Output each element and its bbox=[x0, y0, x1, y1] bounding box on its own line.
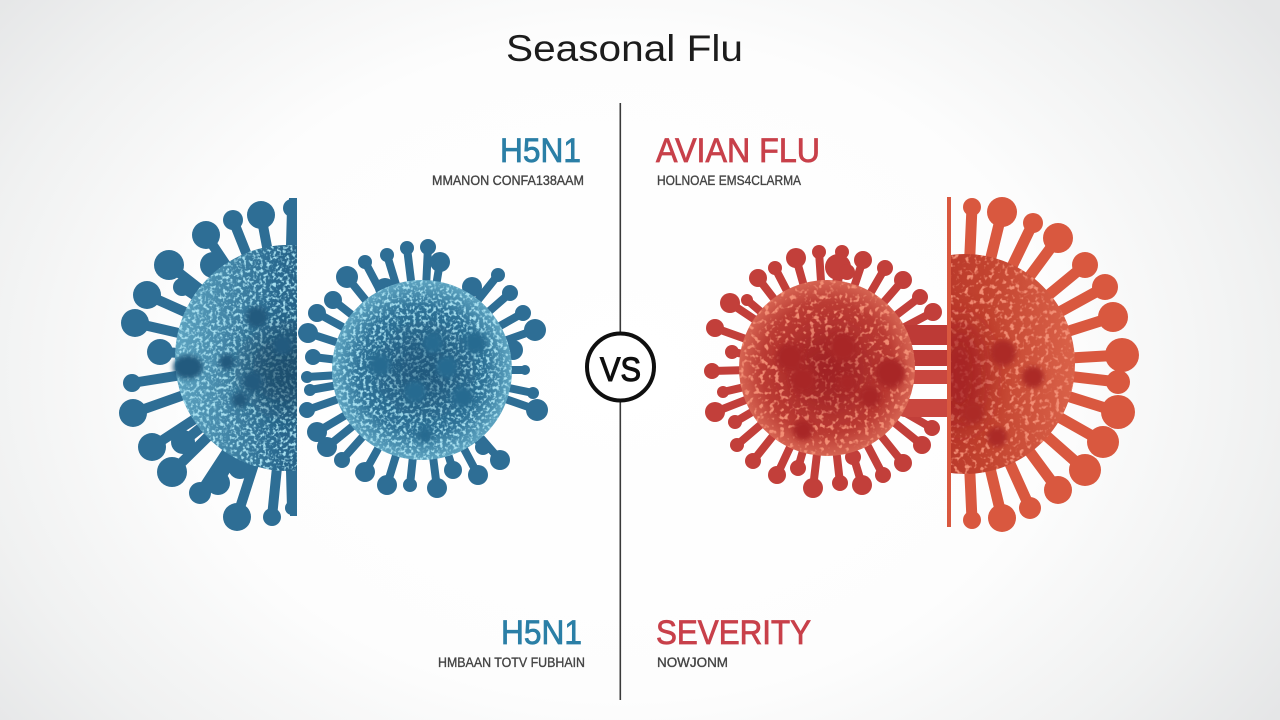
icon: blue full virus bbox=[298, 239, 548, 498]
heading: right bottom: SEVERITY bbox=[656, 614, 811, 652]
title: Seasonal Flu bbox=[506, 28, 743, 69]
heading: right top: HOLNOAE EMS4CLARMA bbox=[657, 173, 801, 188]
icon: red full virus bbox=[704, 245, 947, 498]
heading: left top: MMANON CONFA138AAM bbox=[432, 173, 584, 188]
heading: left bottom bbox=[438, 614, 585, 670]
heading: left top bbox=[432, 132, 584, 188]
icon: red half virus bbox=[947, 197, 1139, 532]
heading: right bottom: NOWJONM bbox=[657, 655, 728, 670]
heading: right top bbox=[656, 132, 820, 188]
VS badge bbox=[587, 334, 654, 400]
heading: left top: H5N1 bbox=[500, 132, 581, 170]
heading: left bottom: HMBAAN TOTV FUBHAIN bbox=[438, 655, 585, 670]
icon: blue half virus bbox=[119, 198, 297, 531]
center divider line bbox=[620, 103, 621, 700]
heading: right top: AVIAN FLU bbox=[656, 132, 820, 170]
heading: left bottom: H5N1 bbox=[501, 614, 582, 652]
heading: right bottom bbox=[656, 614, 811, 670]
VS badge: VS bbox=[600, 351, 641, 389]
